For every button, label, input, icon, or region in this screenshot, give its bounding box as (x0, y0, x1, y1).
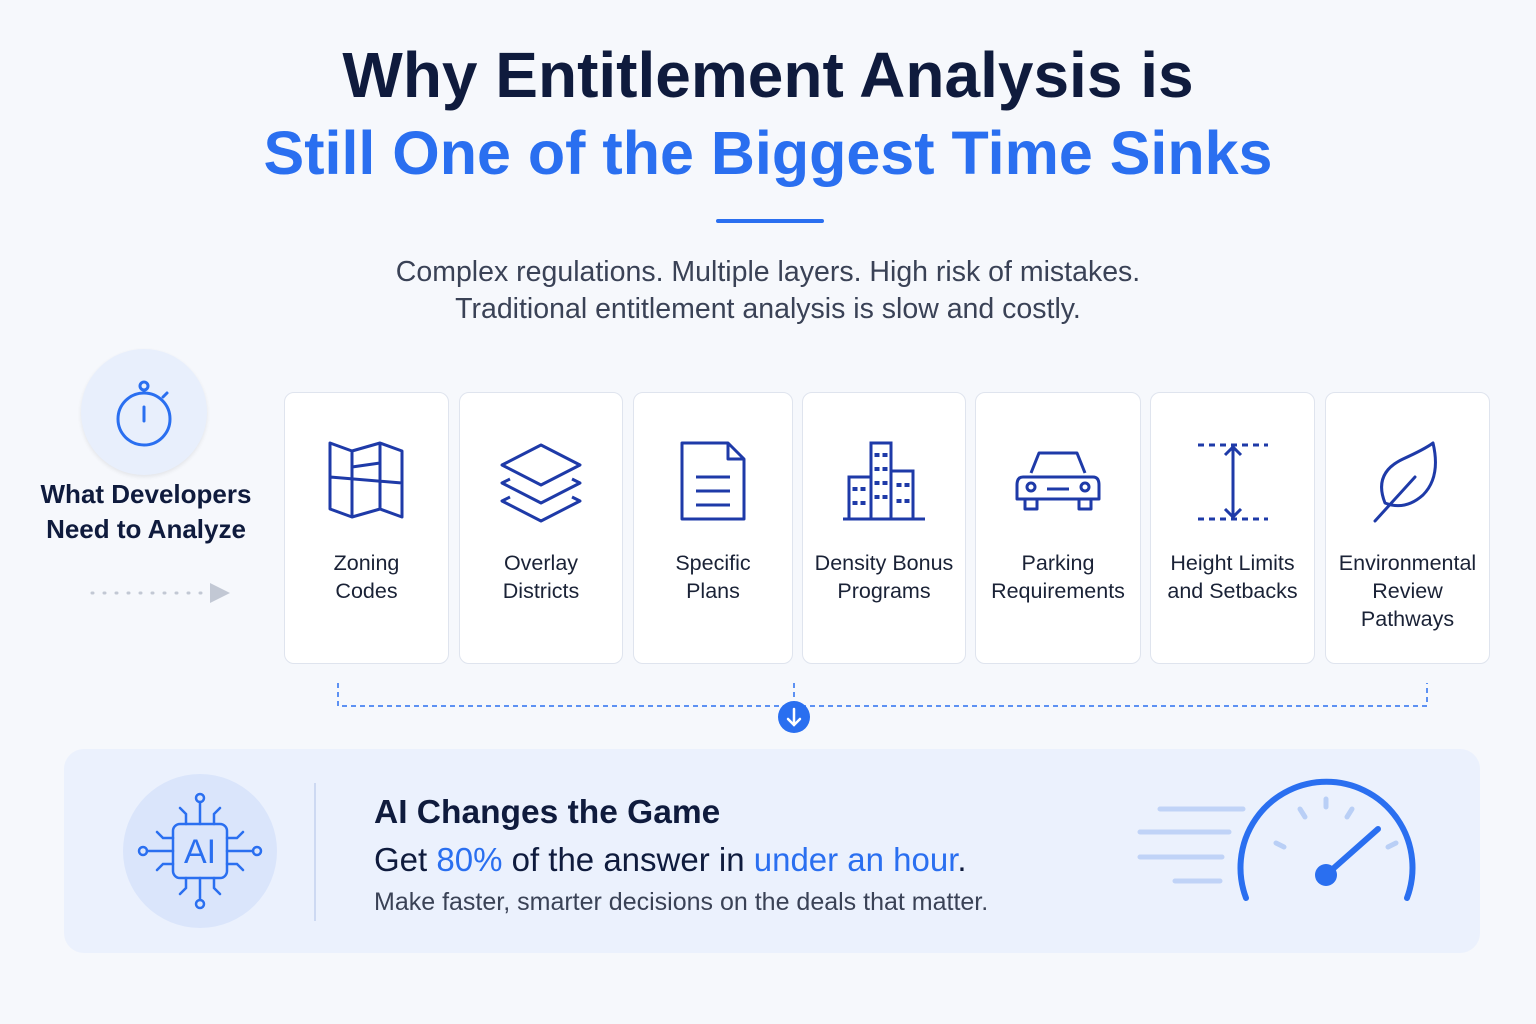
card: zoning: Codes (335, 579, 398, 603)
card: height: Height Limits (1170, 551, 1295, 575)
card: overlay (459, 392, 623, 664)
card: density (802, 392, 966, 664)
card: parking: Requirements (991, 579, 1125, 603)
icon: AI chip (123, 774, 277, 928)
title: Why Entitlement Analysis is (342, 39, 1194, 111)
subtitle: Complex regulations. Multiple layers. High risk of mistakes. (396, 256, 1140, 288)
card: environmental (1325, 392, 1490, 664)
card: specific plans: Plans (686, 579, 740, 603)
card: height: and Setbacks (1167, 579, 1298, 603)
AI text: Make faster, smarter decisions on the deals that matter. (374, 888, 988, 916)
card: zoning: Zoning (334, 551, 399, 575)
left label (40, 479, 251, 544)
card: overlay: Districts (503, 579, 579, 603)
card: parking (975, 392, 1141, 664)
title (264, 39, 1272, 187)
AI text: Get 80% of the answer in under an hour. (374, 841, 967, 878)
arrow: dotted (90, 583, 230, 603)
subtitle: Traditional entitlement analysis is slow and costly. (455, 293, 1081, 325)
AI text (374, 794, 988, 916)
left label: What Developers (41, 479, 251, 509)
card: environmental: Pathways (1361, 607, 1454, 631)
card: specific plans (633, 392, 793, 664)
divider (314, 783, 316, 921)
connector: dashed bracket (337, 683, 1428, 733)
card: environmental: Review (1372, 579, 1443, 603)
title: Still One of the Biggest Time Sinks (264, 119, 1272, 187)
card: parking: Parking (1022, 551, 1094, 575)
card: environmental: Environmental (1339, 551, 1476, 575)
icon: speedometer (1138, 778, 1416, 901)
card: height (1150, 392, 1315, 664)
subtitle (396, 256, 1140, 325)
AI text: AI Changes the Game (374, 794, 720, 831)
icon: stopwatch (81, 349, 207, 475)
left label: Need to Analyze (46, 514, 246, 544)
card: density: Programs (837, 579, 931, 603)
title underline (716, 219, 824, 223)
card: density: Density Bonus (815, 551, 953, 575)
panel: AI (64, 749, 1480, 953)
card: specific plans: Specific (675, 551, 751, 575)
card: zoning (284, 392, 449, 664)
icon: AI chip: AI (184, 833, 216, 871)
card: overlay: Overlay (504, 551, 578, 575)
